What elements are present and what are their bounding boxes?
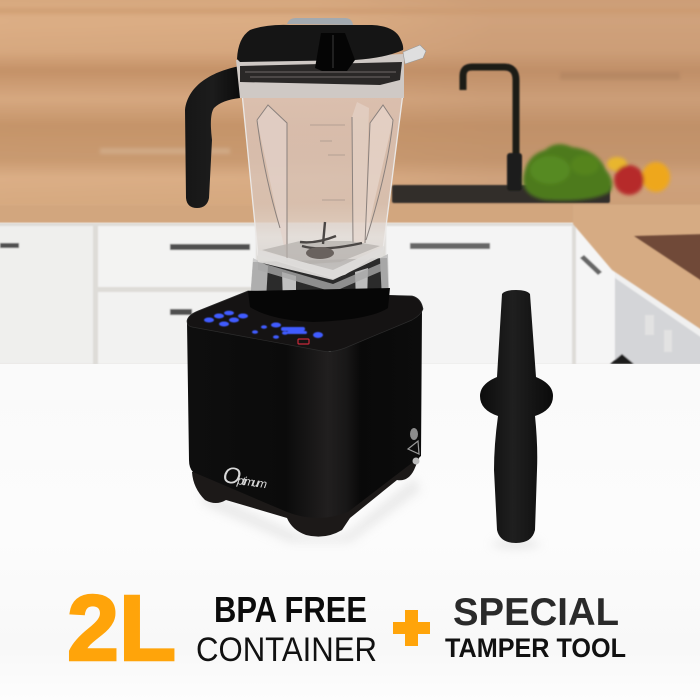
blender product (185, 18, 426, 537)
jar collar base (250, 254, 389, 304)
"CONTAINER" label: CONTAINER (196, 631, 377, 669)
clear jar body (242, 93, 403, 280)
top surface (187, 291, 423, 352)
vegetables (523, 144, 670, 201)
"BPA FREE" heading: BPA FREE (214, 589, 367, 630)
"TAMPER TOOL" label: TAMPER TOOL (445, 633, 626, 663)
tamper tool (480, 290, 553, 543)
touch control panel (204, 311, 323, 339)
lid (237, 18, 403, 71)
white kitchen cabinets (0, 223, 700, 365)
"SPECIAL" heading: SPECIAL (453, 591, 619, 634)
jar seat (248, 288, 390, 322)
countertop strip (0, 205, 700, 223)
base skirt and feet (192, 456, 420, 537)
sink and faucet (392, 67, 610, 203)
wood wall backdrop (0, 0, 700, 208)
plus sign (393, 610, 430, 646)
white table surface (0, 364, 700, 700)
right countertop (573, 205, 700, 332)
stove top (634, 234, 700, 283)
base body (187, 310, 422, 518)
jar rim (236, 45, 426, 98)
oven (610, 268, 700, 364)
handle (185, 66, 240, 208)
caption band (67, 576, 626, 680)
motor base (187, 288, 423, 537)
brand logo: Optimum (221, 461, 269, 493)
side knob (408, 428, 420, 464)
capacity "2L": 2L (67, 576, 176, 680)
